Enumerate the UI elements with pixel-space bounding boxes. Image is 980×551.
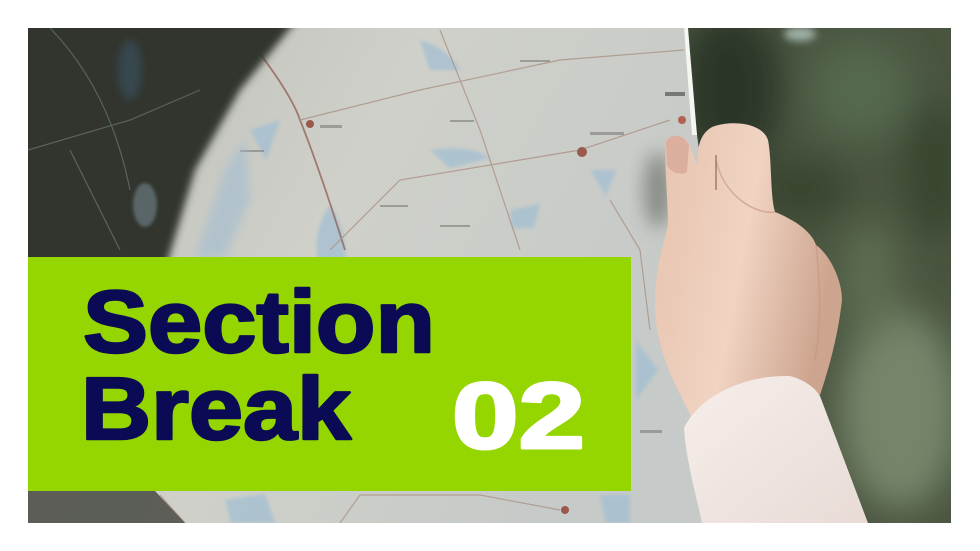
map sheet [10, 10, 720, 523]
sleeve [684, 376, 868, 523]
section number: 02 [452, 363, 585, 468]
panel: green title banner [28, 257, 631, 491]
heading: Section Break [81, 272, 435, 458]
heading: Section Break: Break [81, 359, 352, 458]
map town markers [306, 116, 686, 514]
map roads [160, 28, 684, 523]
blurred forest background [680, 10, 965, 523]
icon: hand gripping the map [655, 123, 842, 418]
map blue water patches [225, 40, 658, 523]
heading: Section Break: Section [83, 272, 435, 371]
map small details [240, 60, 685, 433]
shadowed map area [28, 28, 298, 257]
lower map shade [28, 491, 185, 523]
map edge shadow near fingers [644, 152, 672, 228]
